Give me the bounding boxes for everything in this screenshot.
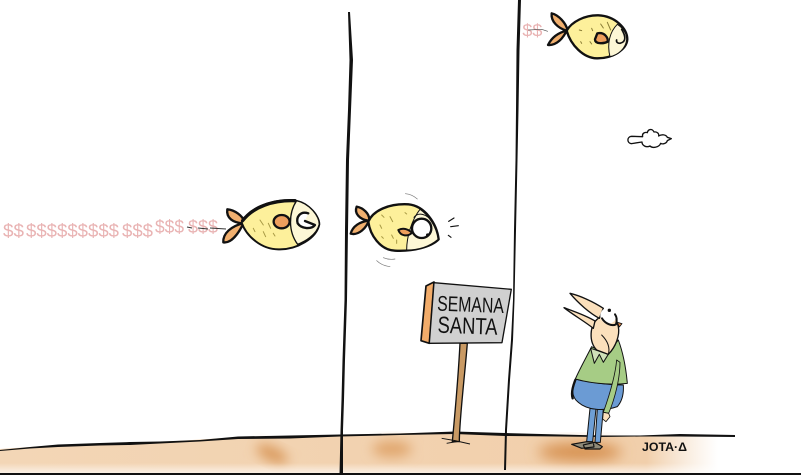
shirt [575, 340, 627, 384]
dollar trail: $$$ [122, 221, 153, 241]
collar [591, 348, 608, 363]
sign: semana santa [421, 282, 511, 444]
dollar signs: $$ [522, 21, 542, 41]
sign board face [429, 283, 511, 343]
shoes [572, 442, 602, 449]
fish: panel 3 [522, 13, 627, 58]
neck and face [591, 310, 619, 354]
sign board side [421, 282, 434, 343]
panel divider: left [340, 12, 353, 475]
panel divider: right [504, 0, 521, 470]
man looking up [564, 293, 627, 449]
eye [600, 308, 616, 324]
sign text line 1: SEMANA [437, 292, 505, 318]
signature: JOTA·Δ [642, 442, 687, 454]
fish: panel 1 [223, 200, 319, 249]
sign post [452, 343, 467, 442]
trousers [573, 379, 623, 410]
legs [587, 408, 603, 442]
sign text line 2: SANTA [437, 312, 498, 340]
nose [570, 293, 603, 318]
dollar trail: $$$ [155, 217, 184, 237]
ear [617, 322, 622, 327]
mouth [564, 308, 595, 328]
cloud [628, 130, 671, 147]
dollar trail [3, 217, 226, 241]
arm [603, 360, 620, 413]
dollar trail: $$$$$$$$$ [26, 221, 119, 241]
dollar trail: $$$ [188, 217, 218, 237]
fish: panel 2 [351, 194, 458, 267]
ground [0, 432, 801, 475]
dollar trail: $$ [3, 221, 24, 241]
